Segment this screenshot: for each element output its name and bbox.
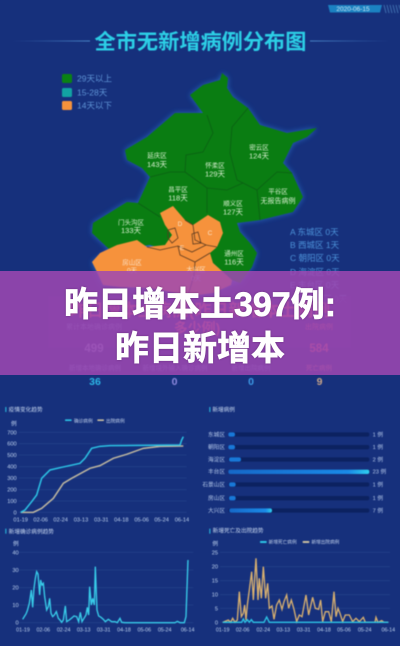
stats panel: 多少例) — [174, 320, 220, 336]
map labels: E — [180, 245, 185, 252]
chart: new deaths and discharges: 02-06 — [236, 628, 250, 634]
map labels: 133天 — [121, 226, 142, 235]
chart: epidemic trend: 05-06 — [134, 517, 149, 523]
chart: epidemic trend: 02-24 — [53, 517, 68, 523]
district code list: D 海淀区 0天 — [290, 267, 340, 277]
chart: new confirmed trend: 10 — [12, 603, 19, 609]
map labels: 127天 — [223, 208, 244, 216]
chart: new cases bars: 1 例 — [373, 480, 383, 488]
district code list: B 西城区 1天 — [290, 240, 340, 250]
district code list: A 东城区 0天 — [290, 227, 339, 237]
chart: new deaths and discharges: 新增死亡病例 — [269, 539, 297, 546]
chart: new deaths and discharges: 03-13 — [277, 628, 290, 634]
chart: new deaths and discharges: 05-24 — [358, 628, 371, 634]
chart: new deaths and discharges: 06-14 — [381, 628, 395, 634]
chart: new cases bars: 1 例 — [373, 443, 383, 451]
stats panel — [48, 296, 351, 355]
map of districts — [92, 73, 317, 296]
chart: epidemic trend: 200 — [7, 488, 17, 494]
legend — [62, 74, 112, 110]
date tag — [328, 5, 400, 13]
legend: 15-28天 — [77, 88, 108, 98]
district borders — [138, 108, 292, 220]
chart: new deaths and discharges: 0 — [215, 620, 218, 626]
chart: epidemic trend: 03-31 — [94, 517, 109, 523]
chart: epidemic trend: 0 — [14, 510, 17, 516]
map labels: 129天 — [205, 170, 226, 178]
stats panel: 昨日增本土病例(昨日新增本土病例 — [70, 300, 330, 320]
chart: new deaths and discharges: 15 — [212, 579, 218, 585]
daily stats: 0 — [172, 376, 178, 388]
chart: epidemic trend: 700 — [7, 430, 17, 436]
chart: new deaths and discharges — [209, 527, 395, 634]
chart: epidemic trend: 02-06 — [33, 517, 48, 523]
chart: new cases bars: 1 例 — [373, 430, 383, 438]
chart: epidemic trend: 确诊病例 — [74, 417, 93, 424]
daily stats: 36 — [89, 376, 101, 388]
daily stats: 0 — [248, 376, 254, 388]
map labels: 平谷区 — [268, 186, 288, 196]
chart: new cases bars: 朝阳区 — [208, 443, 225, 451]
stats panel: 584 — [309, 343, 329, 355]
district code list: F 石景山区 0天 — [290, 294, 348, 304]
daily stats: 死亡病例 — [306, 363, 332, 372]
headline banner — [0, 271, 400, 375]
chart: new cases bars: 新增病例 — [212, 406, 235, 414]
chart: new deaths and discharges: 25 — [212, 550, 218, 556]
map labels: 房山区 — [122, 258, 142, 266]
chart: new confirmed trend: 例 — [13, 540, 19, 548]
chart: epidemic trend — [5, 406, 189, 523]
chart: epidemic trend: 300 — [7, 476, 17, 482]
chart: new deaths and discharges: 20 — [212, 565, 218, 571]
chart: epidemic trend: 500 — [7, 453, 17, 459]
map labels: 怀柔区 — [205, 160, 225, 170]
map labels — [118, 142, 296, 282]
chart: epidemic trend: 03-13 — [74, 517, 88, 523]
chart: new confirmed trend: 20 — [12, 586, 19, 592]
chart: new cases bars: 2 例 — [373, 455, 383, 463]
headline banner: 昨日增本土397例: — [64, 286, 336, 324]
map labels: 143天 — [147, 160, 168, 169]
district code list — [290, 227, 348, 304]
map labels: 密云区 — [249, 142, 269, 152]
map labels: 0天 — [127, 266, 138, 274]
map labels: 124天 — [249, 152, 270, 160]
chart: new confirmed trend: 02-06 — [37, 628, 50, 634]
chart: epidemic trend: 600 — [7, 442, 17, 448]
map labels: 通州区 — [224, 248, 244, 258]
stats panel: 累计本地确诊病例 — [66, 322, 122, 331]
daily stats: 新增境外输入确诊病例 — [142, 363, 208, 372]
map labels: D — [178, 221, 183, 228]
chart: new deaths and discharges: 01-19 — [216, 628, 230, 634]
map labels: 顺义区 — [223, 200, 243, 208]
chart: epidemic trend: 出院病例 — [106, 417, 125, 424]
chart: new confirmed trend: 05-06 — [137, 628, 151, 634]
orange districts — [92, 206, 232, 296]
green districts — [92, 73, 317, 283]
chart: new deaths and discharges: 5 — [215, 606, 218, 612]
map labels: 大兴区 — [186, 264, 206, 274]
map labels: 昌平区 — [168, 186, 188, 194]
chart: new confirmed trend: 40 — [12, 550, 19, 556]
chart: new cases bars: 东城区 — [208, 430, 225, 438]
chart: new confirmed trend: 03-13 — [77, 628, 91, 634]
chart: epidemic trend: 01-19 — [13, 517, 28, 523]
district code list: C 朝阳区 0天 — [290, 253, 340, 263]
headline banner: 昨日新增本 — [115, 330, 285, 368]
map labels: 118天 — [168, 194, 188, 202]
chart: epidemic trend: 例 — [11, 420, 17, 428]
map labels: 门头沟区 — [118, 218, 144, 226]
map labels: C — [208, 230, 213, 237]
chart: new deaths and discharges: 02-24 — [257, 628, 270, 634]
chart: new confirmed trend: 04-18 — [117, 628, 131, 634]
date tag: 2020-06-15 — [336, 6, 370, 13]
chart: new cases bars: 丰台区 — [208, 468, 225, 476]
daily stats: 新增出院病例 — [232, 363, 270, 372]
chart: new cases bars: 房山区 — [208, 494, 225, 502]
map labels: 无报告病例 — [260, 196, 296, 205]
district code list: E 丰台区 0天 — [290, 280, 340, 290]
chart: new deaths and discharges: 例 — [212, 540, 218, 548]
stats panel: 出院病例 — [305, 322, 333, 331]
chart: new deaths and discharges: 新增出院病例 — [311, 539, 340, 546]
chart: new confirmed trend: 新增确诊病例趋势 — [9, 527, 54, 535]
chart: new confirmed trend: 0 — [16, 621, 19, 627]
chart: new confirmed trend: 05-24 — [158, 628, 171, 634]
chart: new confirmed trend — [5, 527, 194, 634]
chart: new deaths and discharges: 05-06 — [337, 628, 351, 634]
chart: new confirmed trend: 30 — [12, 568, 19, 574]
map labels: 0天 — [191, 274, 202, 282]
legend: 14天以下 — [77, 100, 112, 110]
chart: epidemic trend: 05-24 — [154, 517, 169, 523]
chart: new deaths and discharges: 04-18 — [317, 628, 331, 634]
chart: new confirmed trend: 01-19 — [16, 628, 30, 634]
chart: new confirmed trend: 03-31 — [97, 628, 111, 634]
chart: new confirmed trend: 02-24 — [57, 628, 71, 634]
chart: new deaths and discharges: 新增死亡及出院趋势 — [213, 527, 264, 535]
chart: new cases bars: 石景山区 — [202, 480, 225, 488]
chart: new deaths and discharges: 03-31 — [297, 628, 311, 634]
chart: new cases bars — [202, 406, 387, 514]
chart: epidemic trend: 04-18 — [114, 517, 129, 523]
legend: 29天以上 — [77, 74, 112, 84]
chart: new confirmed trend: 06-14 — [181, 628, 194, 634]
stats panel: 499 — [84, 343, 104, 355]
chart: new cases bars: 7 例 — [373, 506, 383, 514]
chart: new cases bars: 海淀区 — [208, 455, 225, 463]
chart: new cases bars: 大兴区 — [208, 506, 225, 514]
chart: new cases bars: 1 例 — [373, 494, 383, 502]
daily stats: 新增本地确诊病例 — [69, 363, 121, 372]
chart: epidemic trend: 100 — [7, 499, 17, 505]
chart: epidemic trend: 400 — [7, 465, 17, 471]
chart: epidemic trend: 06-14 — [175, 517, 189, 523]
central district borders — [147, 220, 217, 296]
chart: new cases bars: 23 例 — [373, 468, 387, 476]
map labels: 延庆区 — [147, 150, 167, 160]
chart: new deaths and discharges: 10 — [212, 593, 218, 599]
daily stats — [69, 363, 332, 388]
chart: epidemic trend: 疫情变化趋势 — [9, 406, 43, 414]
map labels: 116天 — [224, 258, 244, 266]
title: 全市无新增病例分布图 — [95, 29, 306, 54]
daily stats: 9 — [317, 376, 323, 388]
